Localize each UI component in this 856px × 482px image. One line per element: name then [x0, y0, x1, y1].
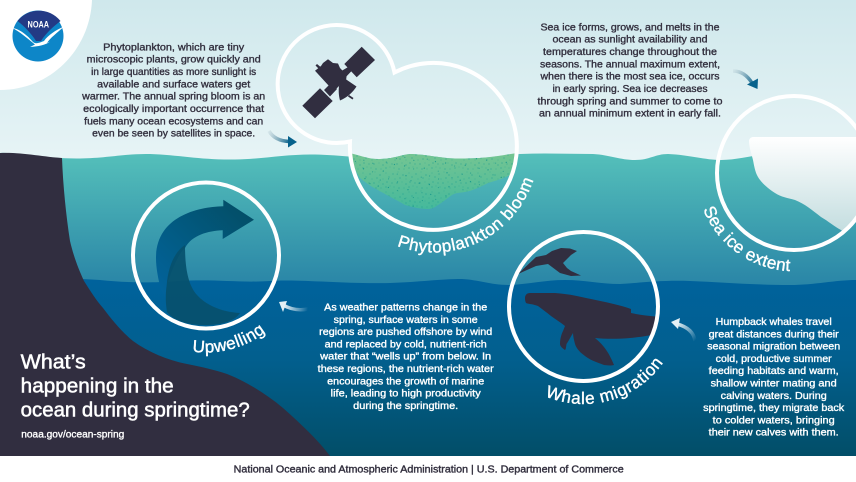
text block: upwelling: these regions, the nutrient-rich water [318, 364, 494, 375]
phytoplankton bloom patch [352, 153, 514, 209]
text block: sea ice [538, 22, 723, 120]
text block: phytoplankton: warmer. The annual spring bloom is an [81, 92, 265, 103]
text block: phytoplankton: available and surface waters get [97, 79, 250, 90]
title [21, 352, 250, 422]
text block: humpback whales: calving waters. During [721, 391, 827, 402]
text block: upwelling: during the springtime. [353, 401, 458, 412]
icon: whale migration circle [509, 232, 662, 381]
text block: sea ice: Sea ice forms, grows, and melts in the [540, 22, 720, 33]
text block: humpback whales: shallow winter mating and [711, 378, 837, 390]
label: whale migration: Whale migration [548, 358, 663, 404]
footer: National Oceanic and Atmospheric Administration | U.S. Department of Commerce [234, 463, 624, 475]
text block: humpback whales: seasonal migration between [707, 342, 840, 353]
text block: upwelling [318, 302, 494, 412]
text block: phytoplankton: in large quantities as more sunlight is [91, 67, 256, 78]
text block: upwelling: life, leading to high productivity [331, 389, 481, 400]
icon: sea ice circle [717, 96, 856, 260]
icon: satellite [302, 47, 375, 118]
title: What’s [21, 352, 86, 374]
text block: upwelling: and replaced by cold, nutrient-rich [325, 339, 487, 350]
text block: sea ice: temperatures change throughout the [543, 47, 717, 58]
text block: humpback whales: their new calves with them. [709, 428, 839, 439]
arrow: to upwelling [279, 301, 308, 312]
website link: noaa.gov/ocean-spring [21, 429, 124, 441]
text block: sea ice: seasons. The annual maximum extent, [540, 59, 720, 70]
text block: humpback whales: Humpback whales travel [716, 317, 832, 328]
text block: phytoplankton: microscopic plants, grow quickly and [87, 55, 261, 66]
text block: sea ice: when there is the most sea ice, occurs [539, 72, 720, 83]
sea ice block [749, 137, 856, 231]
label: phytoplankton bloom: Phytoplankton bloom [398, 178, 534, 256]
ocean surface water layer [0, 153, 856, 290]
title: ocean during springtime? [21, 400, 250, 422]
text block: sea ice: in early spring. Sea ice decreases [552, 84, 708, 95]
label: sea ice extent: Sea ice extent [704, 206, 790, 272]
text block: phytoplankton: even be seen by satellites in space. [92, 129, 255, 140]
corner white badge [0, 0, 92, 90]
label: upwelling: Upwelling [194, 325, 266, 356]
text block: humpback whales: to colder waters, bringing [713, 415, 835, 426]
text block: sea ice: ocean as sunlight availability and [552, 35, 708, 46]
text block: phytoplankton: Phytoplankton, which are tiny [103, 42, 244, 53]
text block: phytoplankton [81, 42, 265, 140]
icon: upwelling arrow [156, 200, 254, 282]
deep water layer [0, 278, 856, 456]
text block: humpback whales: springtime, they migrate back [703, 403, 845, 414]
dark land mass [0, 153, 330, 456]
text block: upwelling: As weather patterns change in the [324, 302, 488, 314]
sky background [0, 0, 856, 160]
text block: humpback whales: cold, productive summer [716, 354, 832, 365]
satellite and bloom circle outline [278, 25, 517, 230]
icon: whale tail [518, 248, 581, 276]
text block: upwelling: encourages the growth of marine [327, 376, 485, 387]
text block: phytoplankton: ecologically important occurrence that [83, 104, 264, 115]
text block: humpback whales: feeding habitats and warm, [709, 366, 839, 377]
text block: humpback whales: great distances during their [709, 329, 839, 340]
icon: NOAA logo [12, 10, 64, 62]
icon: NOAA logo: NOAA [28, 19, 49, 29]
text block: upwelling: regions are pushed offshore by wind [319, 327, 492, 338]
footer [0, 456, 856, 482]
text block: phytoplankton: fuels many ocean ecosystems and can [84, 116, 263, 127]
arrow: to whale [671, 318, 695, 341]
arrow: to satellite [269, 131, 297, 148]
text block: upwelling: water that “wells up” from below. In [319, 352, 491, 363]
icon: upwelling circle [133, 182, 279, 328]
text block: sea ice: through spring and summer to come to [538, 96, 723, 107]
arrow: to sea ice [733, 71, 758, 89]
icon: whale body [525, 293, 662, 365]
text block: sea ice: an annual minimum extent in early fall. [539, 109, 721, 120]
title: happening in the [21, 376, 174, 398]
text block: upwelling: spring, surface waters in some [334, 315, 478, 326]
text block: humpback whales [703, 317, 845, 439]
